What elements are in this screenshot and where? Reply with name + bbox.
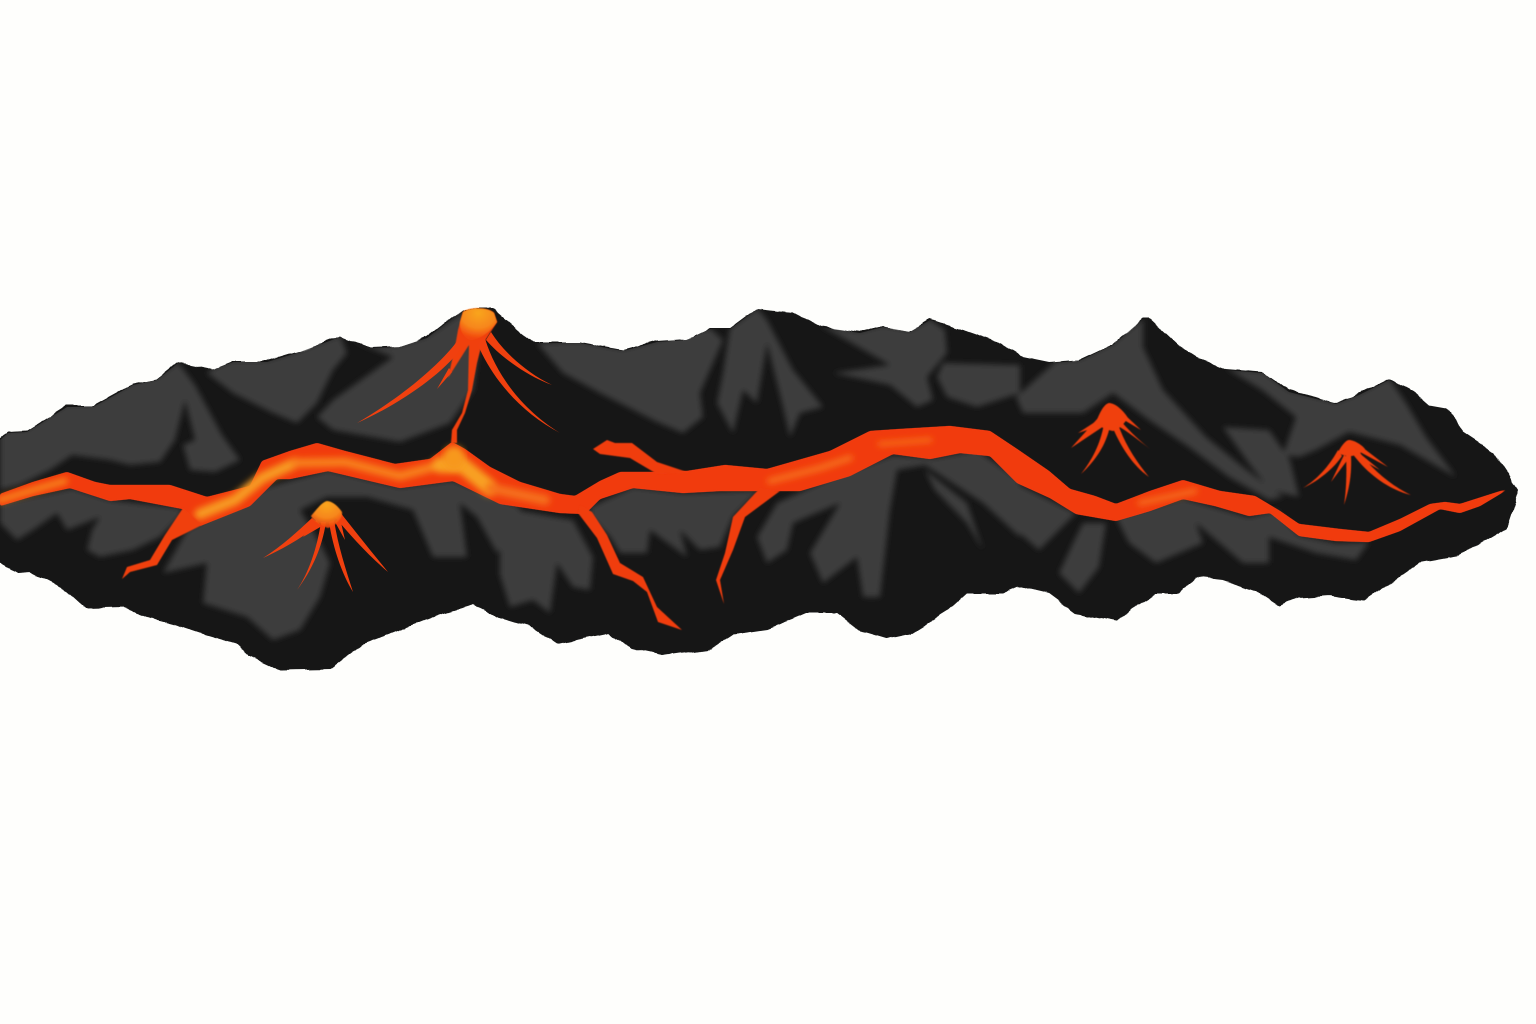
lava branch: upper fork [593,440,690,474]
lava branch: lower centre [578,505,682,630]
volcano: far right cone [1303,440,1411,505]
crater glow at lava junction [443,446,465,470]
lava branch: lower left [122,508,202,579]
illustration: volcanic ridge with lava flows [0,307,1518,670]
lava river glowing core [0,440,1195,514]
lava branch: right fissure [716,488,780,604]
main lava river [0,426,1510,542]
dark land silhouette [0,309,1518,669]
volcano: right cone [1071,403,1154,477]
volcano: main erupting crater [357,308,560,470]
volcano: lower left cone [263,501,388,592]
grey mountain ridges [0,308,1456,640]
